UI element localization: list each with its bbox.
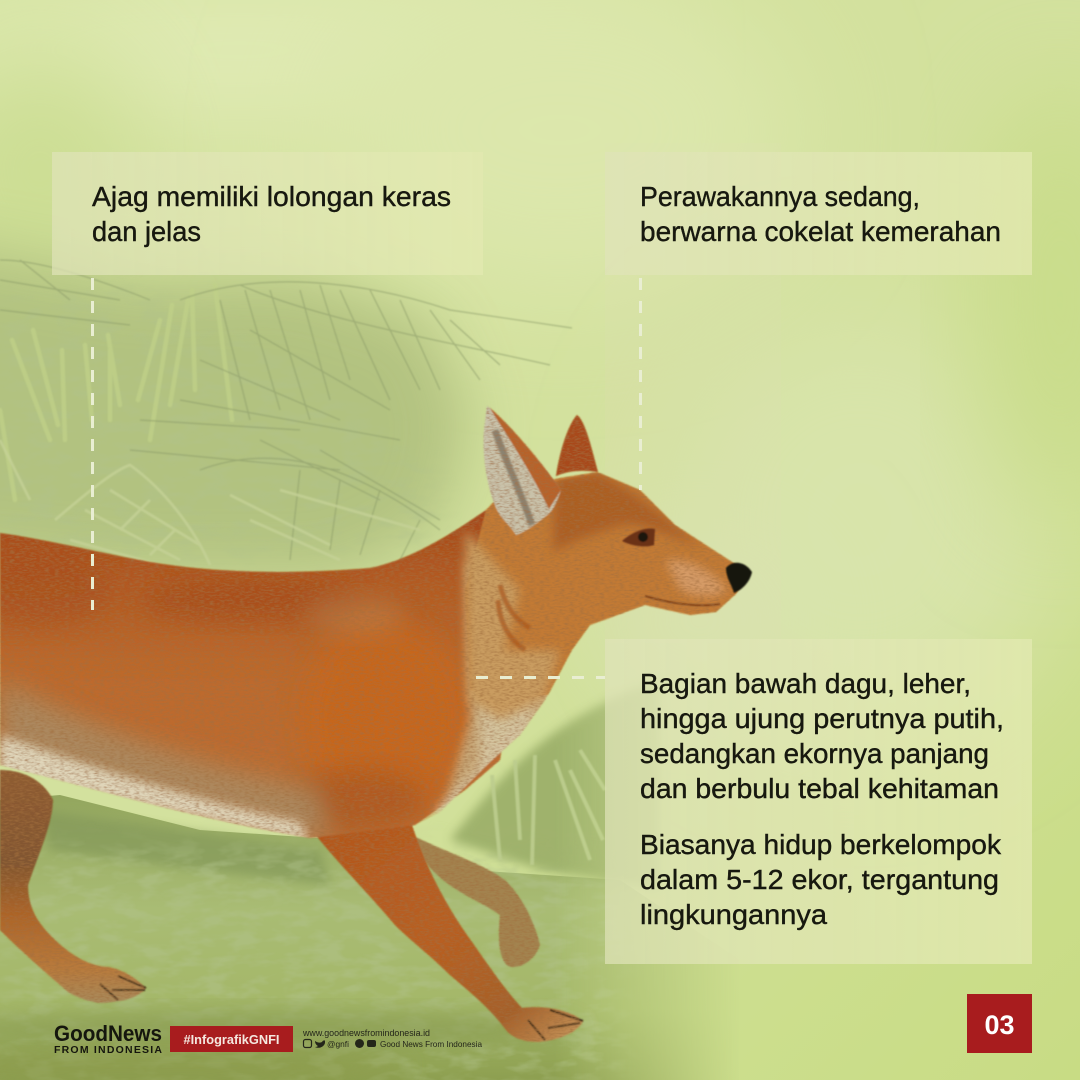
dog body shading xyxy=(0,555,590,842)
group size text: Biasanya hidup berkelompok xyxy=(640,829,1002,860)
icon: facebook xyxy=(355,1039,364,1048)
build text: berwarna cokelat kemerahan xyxy=(640,216,1001,247)
hashtag badge xyxy=(170,1026,293,1052)
dog ear dark fur xyxy=(495,430,532,525)
dog right ear xyxy=(556,415,598,476)
underside text: dan berbulu tebal kehitaman xyxy=(640,773,999,804)
dog head shading xyxy=(465,472,728,720)
underside text: hingga ujung perutnya putih, xyxy=(640,703,1004,734)
page number badge xyxy=(967,994,1032,1053)
dog left ear xyxy=(484,406,561,535)
palm foliage background xyxy=(0,240,572,580)
dashed connector: underside xyxy=(476,676,605,679)
dog eye xyxy=(622,529,655,546)
website and social handles: @gnfi xyxy=(327,1039,349,1049)
panel: howl xyxy=(52,152,483,275)
page number badge: 03 xyxy=(984,1010,1015,1040)
panel: underside and group size xyxy=(605,639,1032,964)
icon: instagram xyxy=(304,1040,312,1048)
panel: build and colour xyxy=(605,152,1032,275)
howl text: dan jelas xyxy=(92,216,201,247)
illustration: wild dog (ajag) xyxy=(0,406,750,1042)
hashtag badge: #InfografikGNFI xyxy=(184,1033,280,1047)
dog body xyxy=(0,510,520,838)
build text: Perawakannya sedang, xyxy=(640,181,920,212)
logo: GoodNews From Indonesia: FROM INDONESIA xyxy=(54,1044,162,1056)
dog neck and head xyxy=(465,472,750,700)
logo: GoodNews From Indonesia: GoodNews xyxy=(54,1021,162,1046)
dog ear inner rim xyxy=(489,407,561,509)
underside text: Bagian bawah dagu, leher, xyxy=(640,668,971,699)
group size text: lingkungannya xyxy=(640,899,827,930)
howl text: Ajag memiliki lolongan keras xyxy=(92,181,451,212)
underside text: sedangkan ekornya panjang xyxy=(640,738,989,769)
dog nose xyxy=(726,563,752,593)
dog hind leg xyxy=(0,770,146,1003)
group size text: dalam 5-12 ekor, tergantung xyxy=(640,864,999,895)
icon: youtube xyxy=(367,1040,376,1047)
icon: twitter xyxy=(315,1040,325,1048)
dashed connector: build xyxy=(639,278,642,490)
dashed connector: howl xyxy=(91,278,94,610)
website and social handles: www.goodnewsfromindonesia.id xyxy=(302,1028,430,1038)
website and social handles xyxy=(302,1028,482,1049)
website and social handles: Good News From Indonesia xyxy=(380,1039,482,1049)
logo: GoodNews From Indonesia xyxy=(54,1021,162,1056)
ground and lower vegetation xyxy=(0,680,740,1080)
dog paws xyxy=(100,976,583,1040)
dog near front leg xyxy=(310,825,583,1042)
dog far front leg xyxy=(412,835,540,967)
